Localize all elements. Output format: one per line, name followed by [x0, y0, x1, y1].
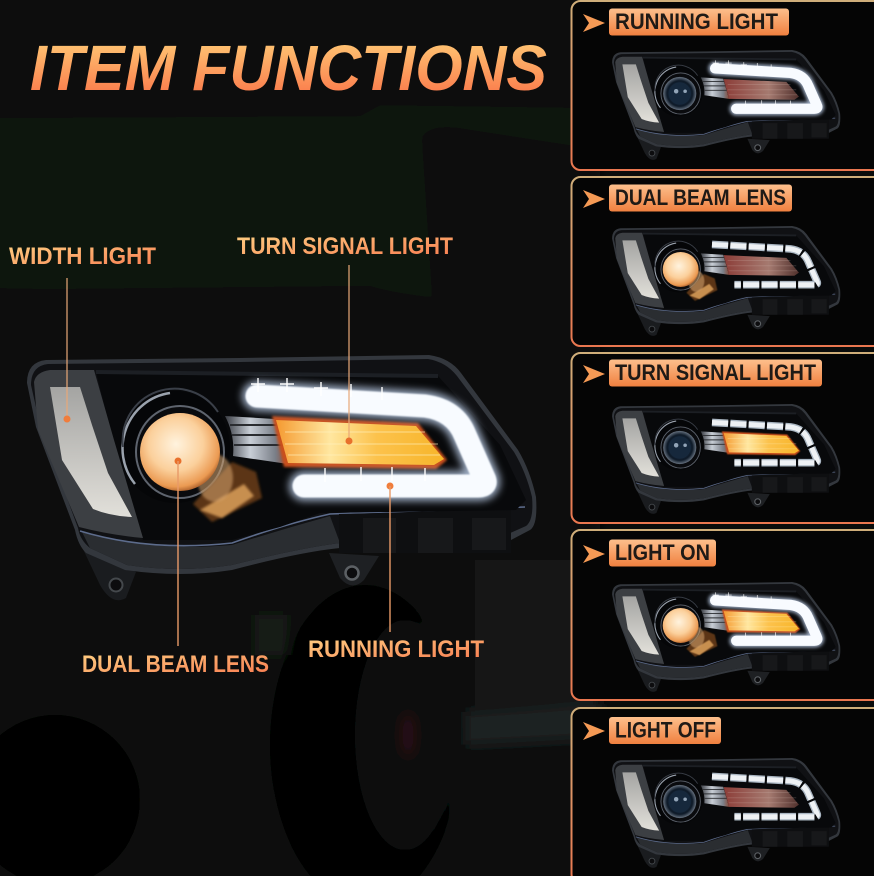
icon: arrow — [583, 14, 605, 32]
icon: arrow — [583, 545, 605, 563]
background: truck scene — [0, 0, 600, 876]
callout: turn signal light — [237, 233, 453, 444]
icon: arrow — [583, 722, 605, 740]
headlight: turn signal on — [612, 404, 840, 514]
label pill: LIGHT OFF — [615, 718, 716, 742]
label pill: TURN SIGNAL LIGHT — [615, 360, 817, 385]
label pill: RUNNING LIGHT — [615, 9, 779, 34]
callout: dual beam lens — [82, 458, 269, 678]
callout: width light: WIDTH LIGHT — [9, 243, 156, 270]
panel: light on — [572, 530, 874, 700]
callout: running light — [308, 482, 484, 663]
panel: light off — [572, 708, 874, 876]
callout: turn signal light: TURN SIGNAL LIGHT — [237, 233, 453, 260]
icon: arrow — [583, 365, 605, 383]
callout: dual beam lens: DUAL BEAM LENS — [82, 651, 269, 678]
icon: arrow — [583, 190, 605, 208]
headlight: running light on — [612, 50, 840, 160]
headlight: all lights off — [612, 758, 840, 868]
panel: running light — [572, 1, 874, 170]
headlight: dual beam lens on — [612, 226, 840, 336]
panel: turn signal light — [572, 353, 874, 523]
headlight: all lights on — [612, 582, 840, 692]
label pill: DUAL BEAM LENS — [615, 185, 786, 210]
callout: running light: RUNNING LIGHT — [308, 636, 484, 663]
main headlight — [27, 355, 536, 600]
callout: width light — [9, 243, 156, 422]
title: ITEM FUNCTIONS — [30, 32, 547, 104]
label pill: LIGHT ON — [615, 540, 710, 565]
panel: dual beam lens — [572, 177, 874, 346]
